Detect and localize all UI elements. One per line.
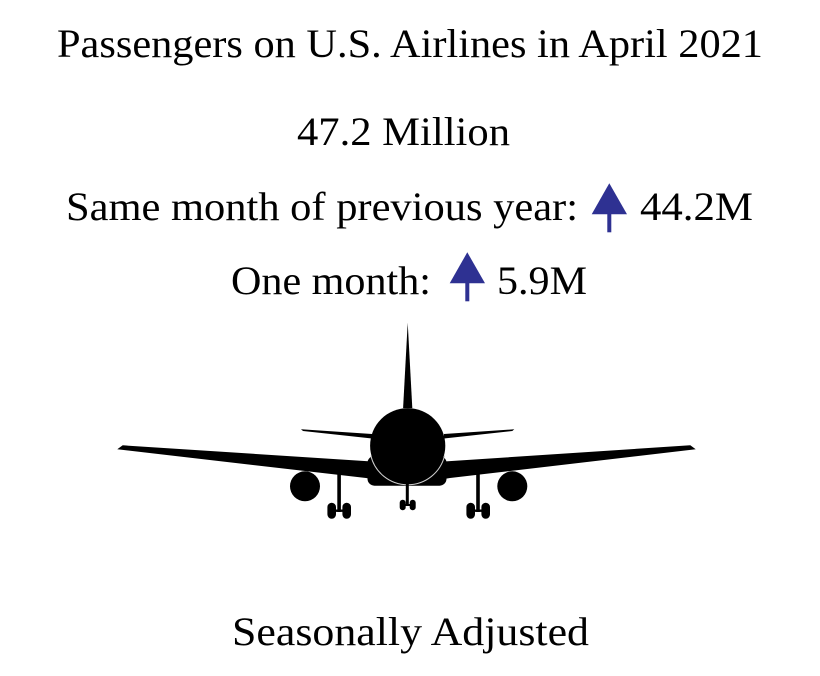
wings bbox=[117, 445, 372, 479]
landing gear right bbox=[466, 474, 490, 519]
month-over-month comparison bbox=[231, 252, 587, 303]
landing gear left bbox=[327, 474, 351, 519]
month-over-month comparison: One month: bbox=[231, 258, 431, 303]
belly fairing bbox=[368, 456, 446, 486]
fuselage highlight bbox=[371, 456, 445, 485]
month change value: 5.9M bbox=[497, 258, 587, 303]
year-over-year comparison: Same month of previous year: bbox=[66, 184, 578, 229]
fuselage bbox=[370, 408, 445, 483]
title: Passengers on U.S. Airlines in April 2021 bbox=[57, 21, 763, 66]
icon: up arrow month bbox=[450, 252, 485, 301]
icon: up arrow year bbox=[592, 183, 627, 232]
year-over-year comparison bbox=[66, 183, 753, 232]
nose gear bbox=[400, 484, 416, 510]
headline value: 47.2 Million bbox=[297, 109, 510, 154]
airplane silhouette bbox=[117, 323, 696, 519]
engines bbox=[290, 471, 320, 501]
horizontal stabilizers bbox=[301, 429, 372, 438]
year change value: 44.2M bbox=[640, 184, 753, 229]
tail fin bbox=[403, 323, 412, 408]
footnote: Seasonally Adjusted bbox=[232, 609, 589, 654]
